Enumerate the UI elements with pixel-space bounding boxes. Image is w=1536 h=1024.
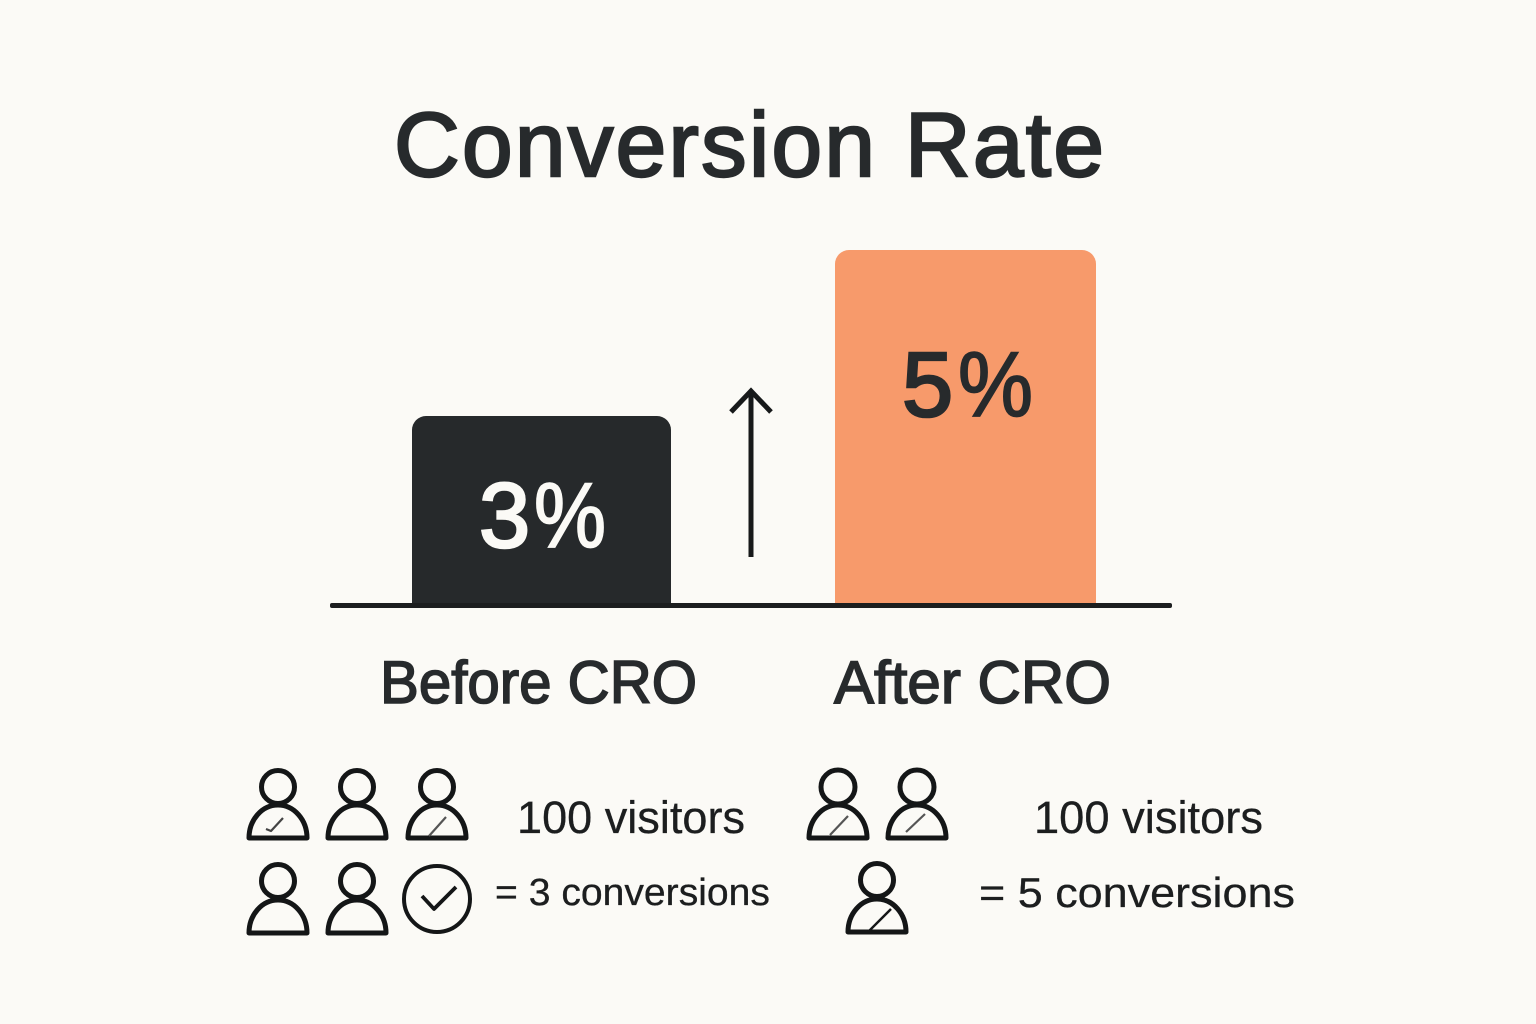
- bar: before CRO: %: [534, 465, 606, 567]
- bar: after CRO: %: [958, 334, 1033, 436]
- icon: person: [328, 770, 386, 838]
- text: 3 conversions: = 3 conversions: [495, 872, 770, 914]
- bar: before CRO: [412, 416, 671, 605]
- icon: person: [249, 864, 307, 933]
- icon: person: [328, 864, 386, 933]
- text: 100 visitors after: 100 visitors: [1034, 792, 1263, 843]
- bar chart: [330, 250, 1172, 608]
- icons: after CRO visitors: [809, 770, 946, 932]
- bar: before CRO: 3: [479, 465, 530, 567]
- icon: person with slash: [848, 864, 906, 932]
- bar: after CRO: 5: [902, 334, 953, 436]
- icon: person with slash: [809, 770, 867, 838]
- icon: person with slash: [408, 770, 466, 838]
- icon: person with slash: [888, 770, 946, 838]
- bar: after CRO: [835, 250, 1096, 605]
- label: before CRO: Before CRO: [380, 649, 697, 716]
- title: Conversion Rate: [394, 95, 1104, 196]
- icon: person with small check: [249, 770, 307, 838]
- text: 5 conversions: = 5 conversions: [979, 869, 1295, 916]
- arrow: increase: [731, 391, 771, 557]
- axis baseline: [330, 603, 1172, 608]
- icons: before CRO visitors: [249, 770, 470, 933]
- text: 100 visitors before: 100 visitors: [517, 792, 745, 843]
- icon: check circle: [404, 866, 470, 932]
- label: after CRO: After CRO: [834, 649, 1111, 716]
